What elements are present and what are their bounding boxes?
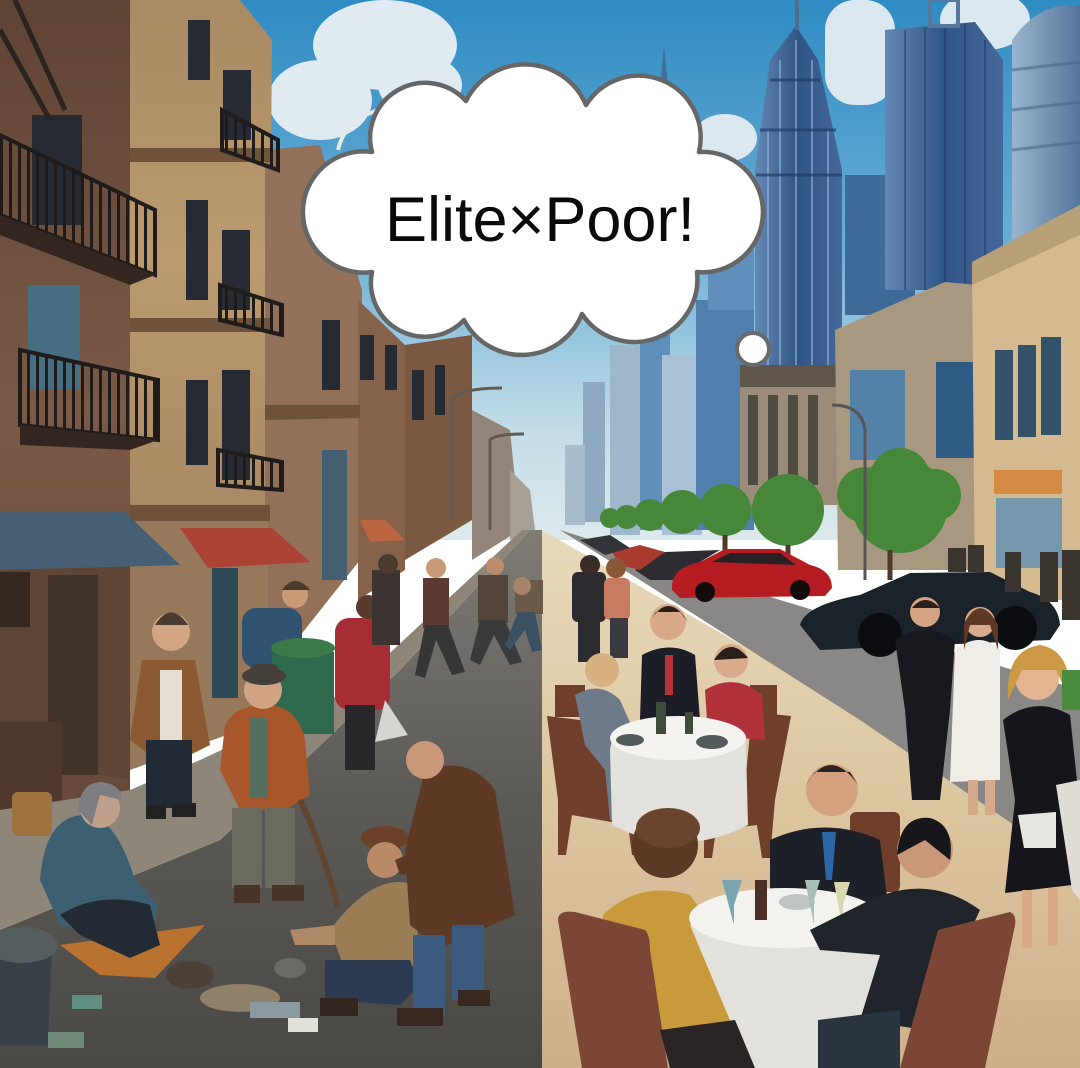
ground left road bbox=[0, 530, 542, 1068]
standing woman bbox=[640, 648, 700, 720]
center pedestrians right bbox=[572, 555, 630, 662]
old man with hat and cane bbox=[220, 664, 338, 908]
bearded man bbox=[770, 828, 888, 905]
crouching beggar bbox=[290, 826, 420, 1016]
couple in evening wear bbox=[895, 597, 1000, 815]
street trees bbox=[600, 405, 961, 580]
right low buildings bbox=[740, 205, 1080, 600]
central glass tower bbox=[755, 0, 842, 400]
windows left bbox=[28, 20, 445, 580]
trash can bbox=[0, 927, 58, 1045]
thought bubble small circle bbox=[737, 333, 769, 365]
awnings and doors left bbox=[0, 512, 405, 812]
yellow jacket diner bbox=[603, 890, 745, 1045]
woman in black dress bbox=[1003, 645, 1080, 948]
suit back diner bbox=[810, 889, 980, 1030]
floor bands bbox=[130, 148, 360, 521]
seated woman bbox=[40, 782, 205, 978]
back right chair bbox=[850, 812, 900, 892]
man in brown coat bbox=[130, 612, 210, 819]
standing bald man bbox=[395, 741, 515, 1026]
lower walls bbox=[130, 520, 268, 770]
seated blond man bbox=[575, 689, 640, 820]
sky bbox=[0, 0, 1080, 540]
thought bubble cloud bbox=[303, 64, 763, 355]
far crowd right bbox=[948, 545, 1080, 620]
chairs bbox=[547, 716, 640, 855]
front chairs bbox=[558, 912, 668, 1068]
bubble caption: Elite×Poor! bbox=[385, 185, 695, 255]
upper table and diners bbox=[547, 604, 791, 858]
clouds left bbox=[268, 0, 462, 140]
ground right paved bbox=[542, 530, 1080, 1068]
clouds right bbox=[693, 0, 1030, 162]
street lamps left bbox=[452, 388, 524, 530]
parked cars bbox=[580, 535, 1060, 657]
lower table and diners bbox=[558, 764, 1015, 1068]
red jacket diner bbox=[705, 682, 765, 740]
table bbox=[690, 900, 888, 1068]
litter bbox=[48, 958, 318, 1048]
distant towers right bbox=[565, 45, 754, 535]
fire escape bbox=[0, 0, 65, 120]
pedestrians left street bbox=[242, 554, 543, 770]
barrel bbox=[12, 792, 52, 836]
left buildings bbox=[0, 0, 535, 820]
right towers bbox=[845, 0, 1080, 315]
table bbox=[610, 718, 748, 842]
balconies bbox=[0, 110, 282, 490]
pale arc behind bubble bbox=[338, 108, 385, 150]
